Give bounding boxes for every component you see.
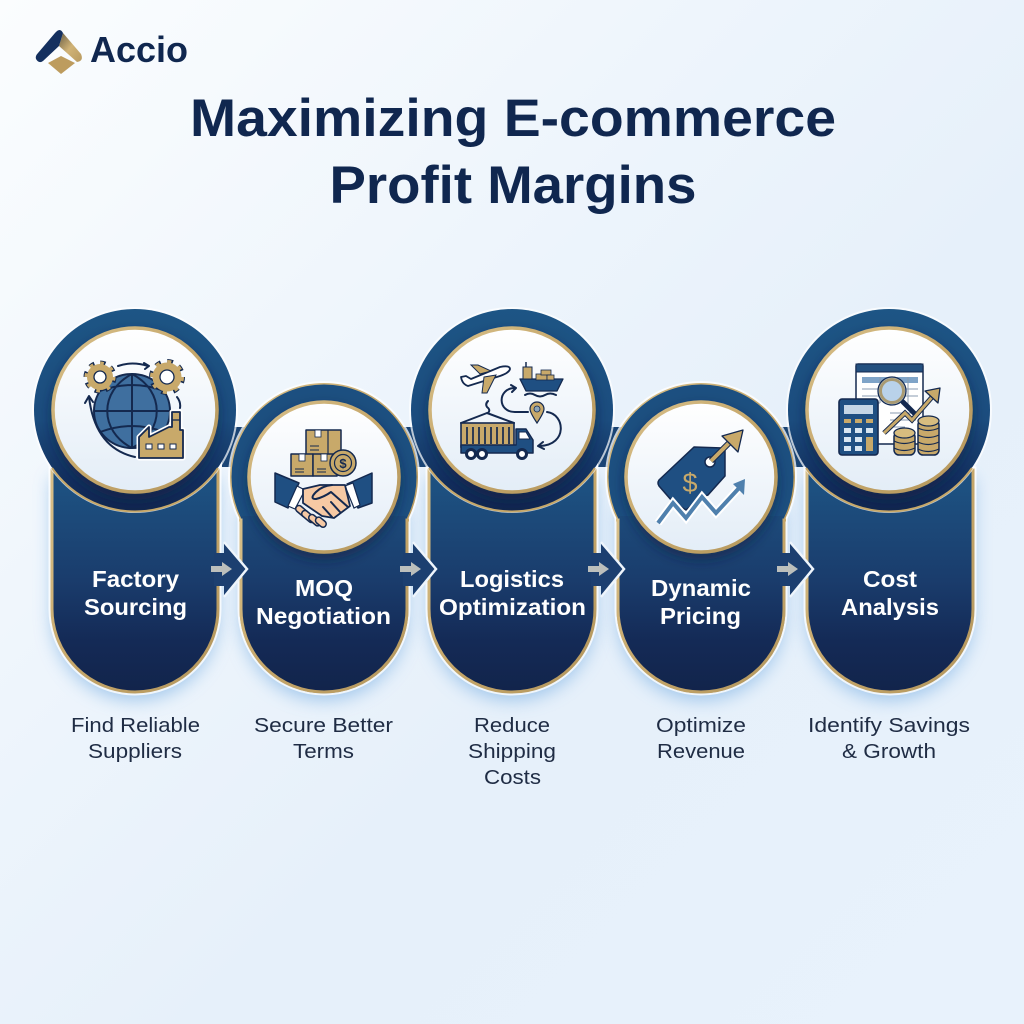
- panel: Cost Analysis: [786, 307, 992, 700]
- icon: plane, ship, truck and route: [461, 362, 563, 458]
- title: [190, 89, 836, 215]
- caption: Identify Savings & Growth: [808, 714, 970, 763]
- caption: Reduce Shipping Costs: Costs: [484, 766, 541, 789]
- arrow: step 1 to 2: [211, 542, 247, 597]
- caption: Secure Better Terms: Secure Better: [254, 714, 393, 737]
- label: Pricing: [660, 603, 741, 629]
- label: [256, 575, 391, 629]
- label: [651, 575, 751, 629]
- caption: Reduce Shipping Costs: Reduce: [474, 714, 550, 737]
- label: [84, 566, 187, 620]
- label: Dynamic: [651, 575, 751, 601]
- arrow: step 4 to 5: [777, 542, 813, 597]
- title: Maximizing E-commerce: [190, 89, 836, 148]
- caption: Optimize Revenue: Revenue: [657, 740, 745, 763]
- label: [439, 566, 586, 620]
- label: Logistics: [460, 566, 564, 592]
- label: MOQ: [295, 575, 353, 601]
- icon: globe, gears and factory: [85, 362, 183, 458]
- icon: price tag with trend arrow: $: [682, 468, 698, 498]
- logo mark: [36, 30, 82, 74]
- caption: Identify Savings & Growth: & Growth: [842, 740, 936, 763]
- label: Optimization: [439, 594, 586, 620]
- logo wordmark: Accio: [90, 29, 188, 70]
- caption: Optimize Revenue: [656, 714, 746, 763]
- icon: boxes, coin and handshake: $: [339, 456, 347, 471]
- caption: Find Reliable Suppliers: Find Reliable: [71, 714, 200, 737]
- arrow: step 2 to 3: [400, 542, 436, 597]
- caption: Find Reliable Suppliers: [71, 714, 200, 763]
- arrow: step 3 to 4: [588, 542, 624, 597]
- panel: MOQ Negotiation: [228, 381, 420, 700]
- label: Analysis: [841, 594, 939, 620]
- caption: Identify Savings & Growth: Identify Savings: [808, 714, 970, 737]
- logo: Accio: [36, 29, 188, 74]
- label: Factory: [92, 566, 179, 592]
- caption: Secure Better Terms: Terms: [293, 740, 354, 763]
- label: Negotiation: [256, 603, 391, 629]
- icon: price tag with trend arrow: [658, 430, 745, 523]
- panel: Logistics Optimization: [409, 307, 615, 700]
- label: [841, 566, 939, 620]
- caption: Reduce Shipping Costs: Shipping: [468, 740, 556, 763]
- icon: calculator, spreadsheet, magnifier and coins: [839, 364, 940, 455]
- label: Sourcing: [84, 594, 187, 620]
- panel: Factory Sourcing: [32, 307, 238, 700]
- caption: Reduce Shipping Costs: [468, 714, 556, 789]
- label: Cost: [863, 566, 917, 592]
- title: Profit Margins: [330, 156, 696, 215]
- caption: Find Reliable Suppliers: Suppliers: [88, 740, 182, 763]
- icon: boxes, coin and handshake: [275, 430, 372, 529]
- caption: Secure Better Terms: [254, 714, 393, 763]
- panel: Dynamic Pricing: [605, 381, 797, 700]
- caption: Optimize Revenue: Optimize: [656, 714, 746, 737]
- connector bands between circles: [222, 427, 806, 467]
